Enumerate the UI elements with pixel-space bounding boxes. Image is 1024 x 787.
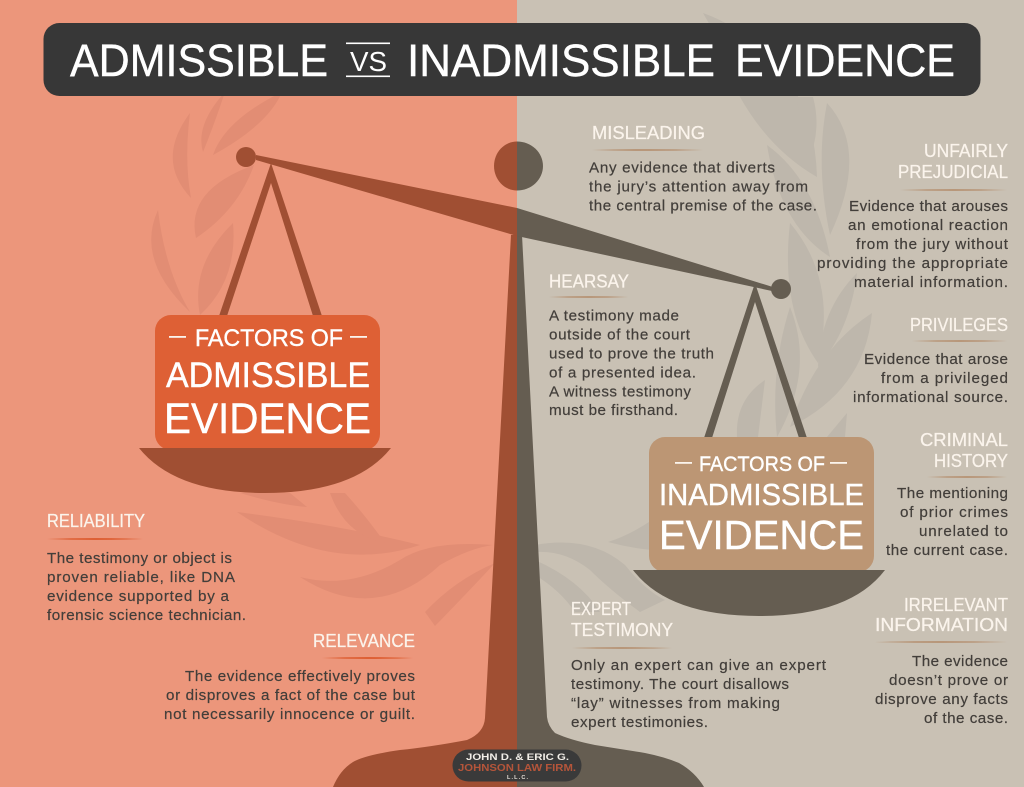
section: criminal history: CRIMINAL	[920, 430, 1008, 450]
title text: INADMISSIBLE	[407, 35, 715, 86]
logo: law firm: JOHN D. & ERIC G.	[466, 752, 569, 763]
section: privileges	[853, 315, 1008, 406]
section: expert testimony: Only an expert can give an expert	[571, 657, 827, 674]
section: expert testimony: “lay” witnesses from making	[571, 695, 780, 712]
left hanger	[219, 163, 322, 316]
section: hearsay: HEARSAY	[549, 272, 629, 292]
panel: inadmissible background	[517, 0, 1024, 787]
section: reliability: proven reliable, like DNA	[47, 569, 236, 586]
section: misleading: the jury’s attention away from	[589, 178, 808, 196]
panel: factors of admissible evidence: EVIDENCE	[164, 395, 371, 443]
section: criminal history: HISTORY	[934, 451, 1008, 471]
section: unfairly prejudicial: material information.	[854, 274, 1008, 291]
scale: stand	[333, 235, 704, 787]
section: hearsay: used to prove the truth	[549, 346, 714, 362]
panel: factors of admissible evidence: FACTORS OF	[195, 325, 343, 352]
section: irrelevant information: disprove any facts	[875, 691, 1008, 708]
logo: law firm: JOHNSON LAW FIRM.	[458, 763, 576, 774]
section: irrelevant information: INFORMATION	[875, 615, 1008, 635]
section: unfairly prejudicial: PREJUDICIAL	[898, 162, 1008, 182]
section: misleading: Any evidence that diverts	[589, 160, 775, 176]
scale: beam	[236, 142, 791, 299]
section: hearsay: of a presented idea.	[549, 364, 696, 382]
title text: EVIDENCE	[735, 35, 955, 86]
panel: factors of inadmissible evidence: INADMISSIBLE	[659, 477, 864, 512]
laurel wreath: right	[535, 13, 872, 612]
section: reliability: RELIABILITY	[47, 511, 145, 531]
section: unfairly prejudicial: UNFAIRLY	[924, 141, 1008, 161]
panel: admissible background	[0, 0, 517, 787]
section: expert testimony	[571, 599, 827, 731]
section: reliability: forensic science technician.	[47, 607, 246, 624]
section: criminal history: the current case.	[886, 542, 1008, 559]
section: relevance: not necessarily innocence or guilt.	[164, 706, 415, 723]
section: irrelevant information: IRRELEVANT	[904, 595, 1008, 615]
section: privileges: Evidence that arose	[864, 351, 1008, 368]
section: expert testimony: TESTIMONY	[571, 620, 673, 640]
title bar	[44, 23, 980, 96]
section: privileges: PRIVILEGES	[910, 315, 1008, 335]
section: hearsay: A testimony made	[549, 308, 679, 324]
panel: factors of inadmissible evidence: FACTORS OF	[699, 453, 825, 476]
section: misleading	[589, 123, 817, 214]
section: relevance: The evidence effectively proves	[185, 668, 415, 685]
section: expert testimony: expert testimonies.	[571, 714, 708, 731]
section: unfairly prejudicial: Evidence that arouses	[849, 198, 1008, 215]
section: misleading: MISLEADING	[592, 123, 705, 143]
section: criminal history: unrelated to	[919, 523, 1008, 540]
section: relevance: or disproves a fact of the case but	[166, 687, 416, 704]
section: unfairly prejudicial: providing the appropriate	[817, 255, 1008, 272]
section: irrelevant information: of the case.	[924, 710, 1008, 727]
section: expert testimony: EXPERT	[571, 599, 631, 619]
section: irrelevant information: The evidence	[912, 653, 1008, 670]
scale: pivot	[494, 142, 517, 190]
section: irrelevant information: doesn’t prove or	[889, 672, 1008, 689]
title text: ADMISSIBLE	[70, 35, 328, 86]
section: expert testimony: testimony. The court disallows	[571, 676, 789, 693]
section: criminal history	[886, 430, 1008, 559]
section: hearsay: outside of the court	[549, 326, 691, 344]
panel: factors of inadmissible evidence	[649, 437, 874, 572]
vs emblem: VS	[350, 46, 387, 77]
section: reliability: The testimony or object is	[47, 550, 232, 567]
section: irrelevant information	[875, 595, 1008, 727]
section: privileges: from a privileged	[881, 370, 1008, 387]
section: relevance: RELEVANCE	[313, 631, 415, 651]
section: unfairly prejudicial: from the jury without	[856, 236, 1009, 253]
left pan	[139, 448, 391, 493]
section: hearsay	[549, 272, 714, 419]
section: reliability: evidence supported by a	[47, 588, 230, 605]
logo: law firm	[452, 750, 582, 782]
section: relevance	[164, 631, 416, 723]
section: criminal history: The mentioning	[897, 485, 1008, 502]
section: unfairly prejudicial: an emotional reaction	[848, 217, 1008, 234]
panel: factors of admissible evidence: ADMISSIBLE	[166, 356, 370, 395]
panel: factors of inadmissible evidence: EVIDENCE	[659, 512, 864, 558]
section: hearsay: A witness testimony	[549, 384, 691, 400]
section: hearsay: must be firsthand.	[549, 402, 678, 419]
right hanger	[704, 283, 807, 438]
section: criminal history: of prior crimes	[900, 504, 1008, 521]
section: misleading: the central premise of the case.	[589, 198, 817, 214]
right pan	[633, 570, 885, 616]
laurel wreath: left	[151, 92, 495, 626]
section: unfairly prejudicial	[817, 141, 1009, 291]
section: privileges: informational source.	[853, 389, 1008, 406]
section: reliability	[47, 511, 246, 624]
logo: law firm: L.L.C.	[507, 775, 528, 781]
panel: factors of admissible evidence	[155, 315, 380, 450]
